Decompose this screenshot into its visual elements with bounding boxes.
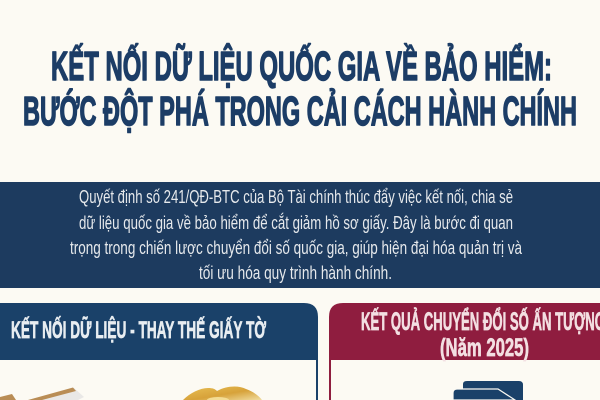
title — [23, 42, 577, 134]
intro text — [70, 187, 523, 283]
illustration: paper stack — [0, 388, 84, 400]
intro text: tối ưu hóa quy trình hành chính. — [199, 263, 392, 283]
illustration: gold coins — [183, 387, 262, 400]
panel: digital results — [329, 303, 600, 400]
panel: data connection — [0, 303, 318, 400]
panel heading: data connection: KẾT NỐI DỮ LIỆU - THAY THẾ GIẤY TỜ — [11, 316, 266, 344]
intro band — [0, 182, 600, 288]
icon: documents — [453, 381, 523, 400]
panel heading: digital results: (Năm 2025) — [440, 334, 529, 362]
panel heading: digital results — [361, 306, 600, 362]
